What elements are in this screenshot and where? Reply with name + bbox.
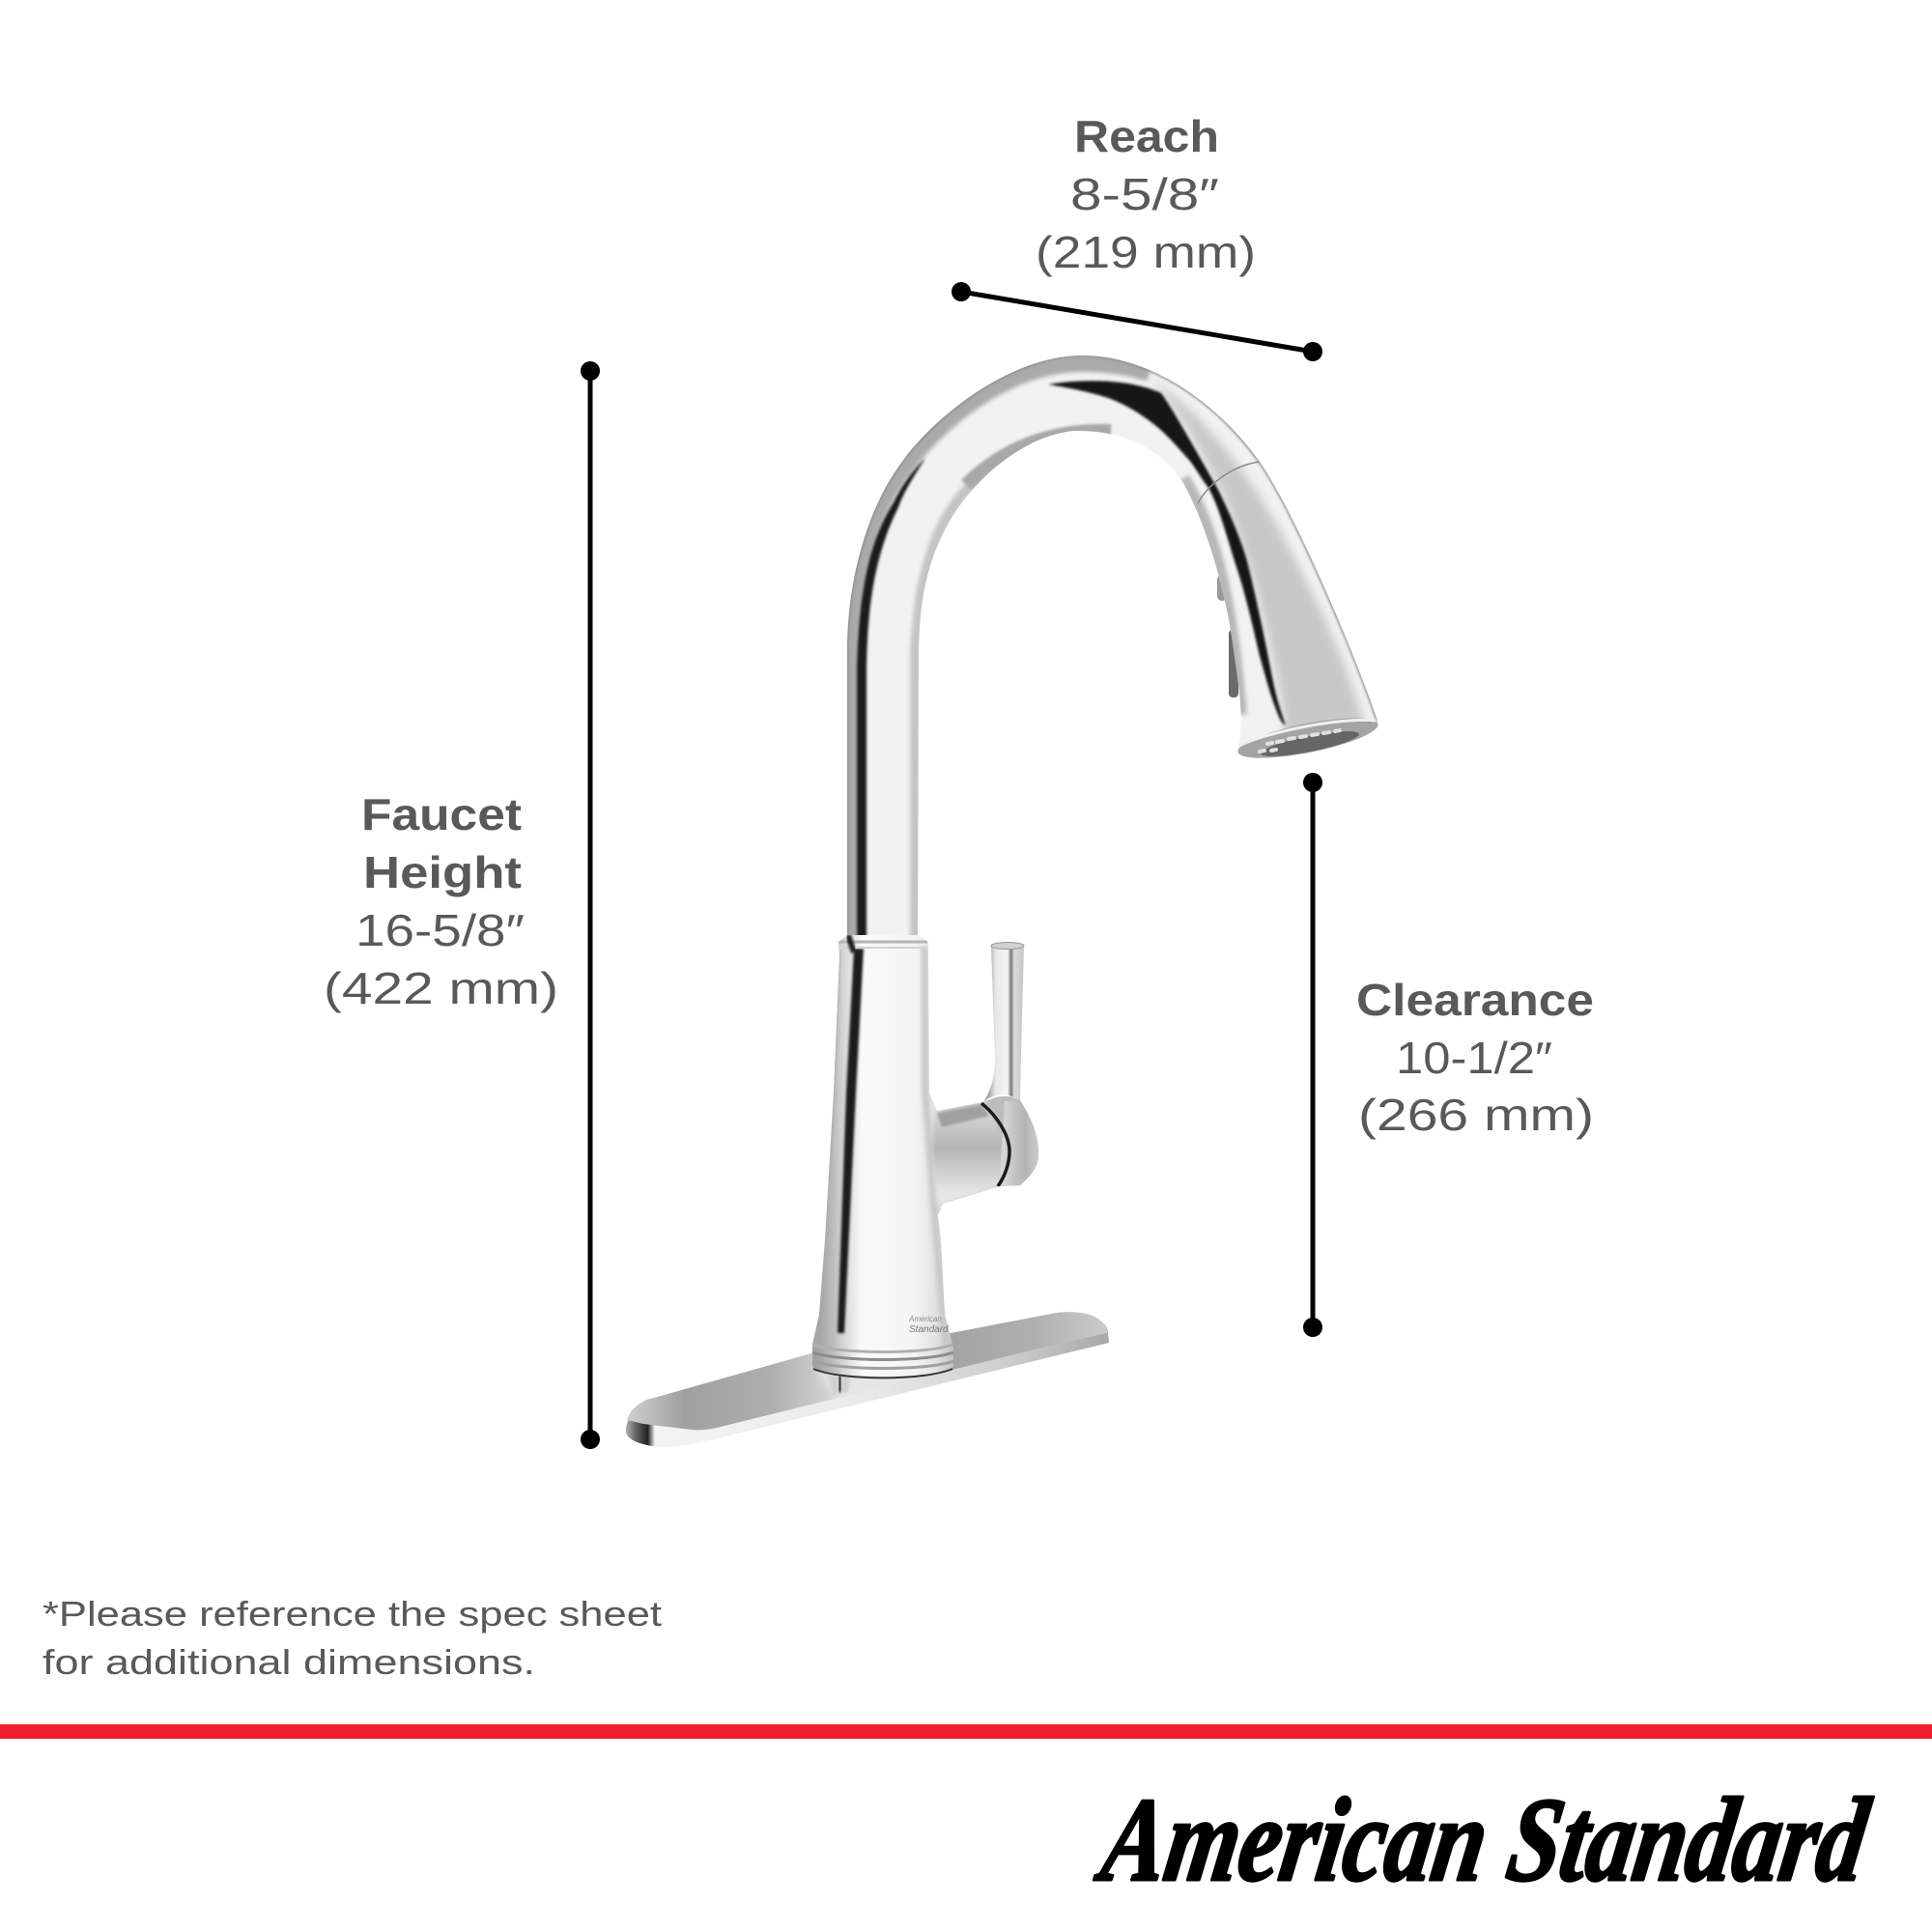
faucet product image: [626, 355, 1381, 1447]
label: faucet height: Height: [363, 847, 522, 897]
lever handle: [983, 943, 1024, 1102]
label: reach: Reach: [1074, 111, 1219, 161]
label: clearance: Clearance: [1356, 975, 1594, 1025]
label: clearance: [1356, 975, 1594, 1140]
label: reach: (219 mm): [1036, 227, 1256, 277]
label: clearance: (266 mm): [1358, 1090, 1594, 1140]
label: faucet height: (422 mm): [324, 963, 558, 1013]
body logo mark: American: [908, 1315, 942, 1323]
dimension line: clearance: [1303, 773, 1322, 1337]
red divider bar: [0, 1724, 1932, 1739]
faucet body: [812, 935, 1039, 1378]
footnote: [43, 1594, 662, 1682]
body logo mark second line: Standard: [909, 1324, 949, 1335]
label: faucet height: Faucet: [361, 789, 522, 839]
label: faucet height: 16-5/8″: [355, 905, 525, 955]
label: faucet height: [324, 789, 558, 1013]
dimension line: reach: [952, 282, 1322, 361]
footnote: for additional dimensions.: [43, 1642, 535, 1682]
footnote: *Please reference the spec sheet: [43, 1594, 662, 1634]
dimension line: faucet height: [581, 361, 600, 1449]
sprayer buttons: [1217, 575, 1238, 697]
label: reach: 8-5/8″: [1070, 169, 1219, 219]
spray head face: [1235, 710, 1381, 766]
label: reach: [1036, 111, 1256, 277]
label: clearance: 10-1/2″: [1396, 1033, 1552, 1083]
deck plate: [626, 1312, 1109, 1447]
spout: [847, 355, 1378, 947]
